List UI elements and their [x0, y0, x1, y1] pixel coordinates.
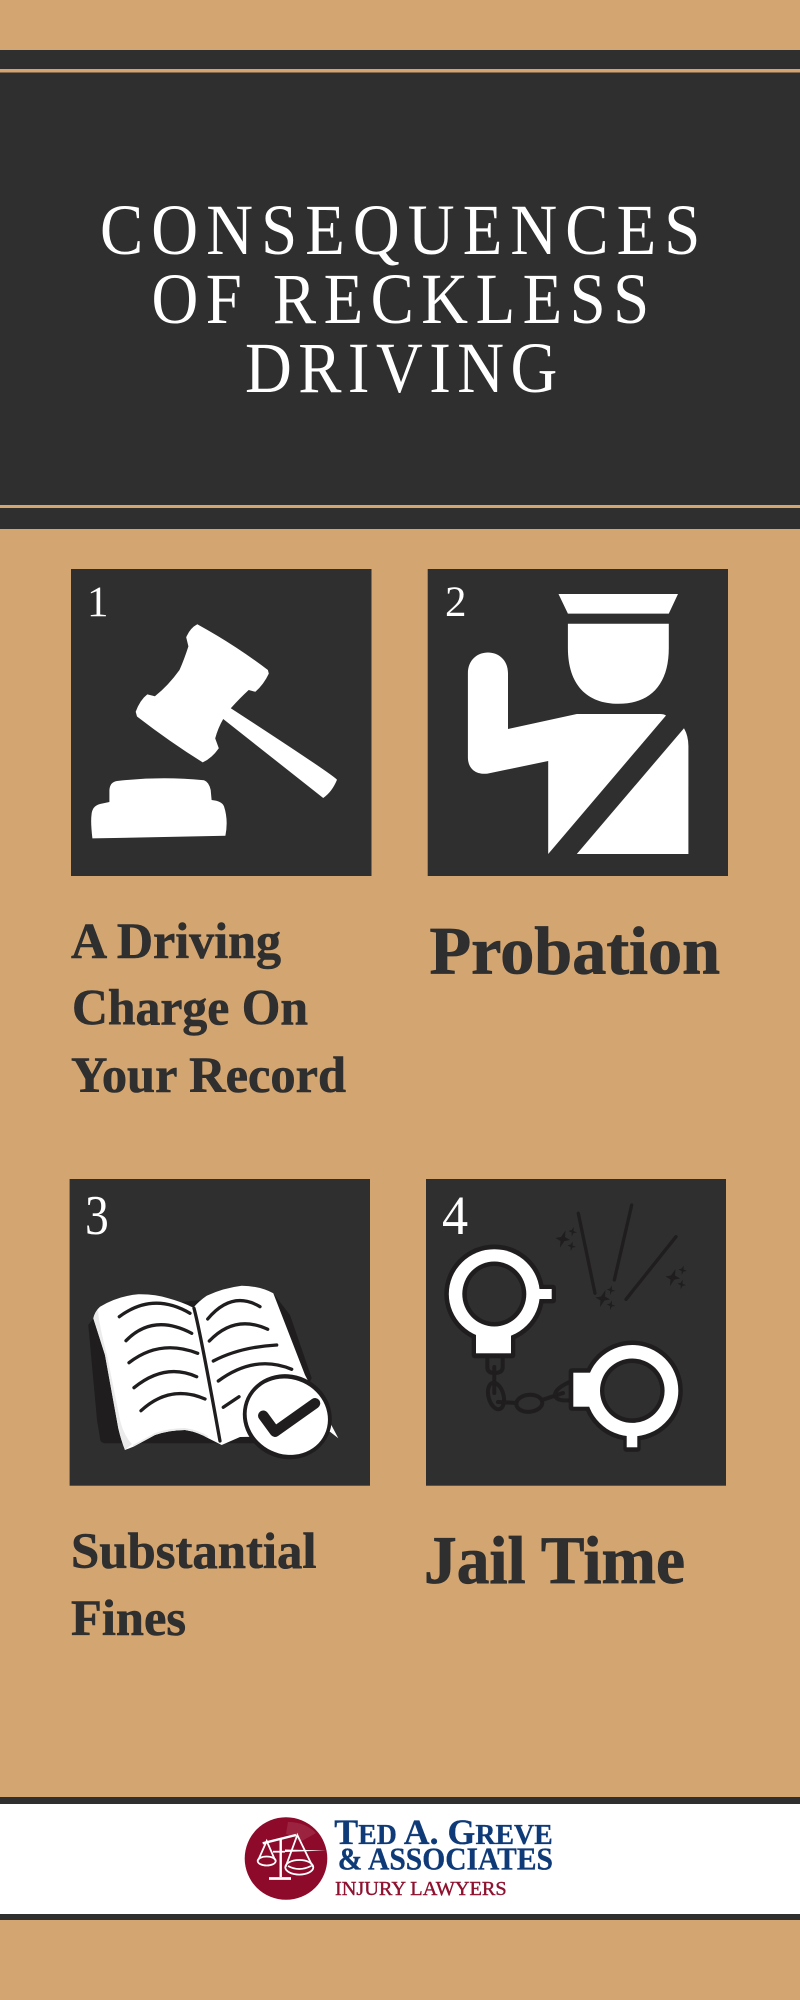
icon: open book with check badge — [88, 1286, 346, 1474]
panel: footer logo band — [0, 1797, 800, 1920]
title: DRIVING — [245, 328, 557, 408]
icon: gavel — [91, 624, 337, 838]
logo: firm name: & ASSOCIATES — [338, 1840, 553, 1876]
panel: title banner — [0, 50, 800, 529]
icon: broken handcuffs — [444, 1205, 687, 1452]
logo: scales of justice emblem — [245, 1817, 327, 1900]
title: CONSEQUENCES — [100, 190, 700, 270]
title — [100, 190, 700, 408]
number 1: 1 — [87, 579, 108, 626]
label: a driving charge on your record — [71, 914, 346, 1104]
label: jail time: Jail Time — [424, 1522, 685, 1598]
panel: item 3 substantial fines — [70, 1179, 370, 1647]
logo: firm name: TED A. GREVE — [334, 1812, 553, 1852]
panel: item 1 driving charge — [71, 569, 372, 1104]
label: substantial fines: Substantial — [71, 1524, 316, 1580]
panel: item 4 jail time — [424, 1179, 726, 1598]
number 3: 3 — [85, 1186, 109, 1247]
label: a driving charge on your record: A Driving — [71, 914, 281, 970]
panel: item 2 probation — [428, 569, 728, 989]
label: substantial fines: Fines — [71, 1591, 186, 1647]
title: OF RECKLESS — [152, 259, 649, 339]
label: a driving charge on your record: Charge On — [72, 980, 308, 1036]
label: probation: Probation — [430, 913, 720, 989]
logo: firm name — [334, 1812, 553, 1876]
number 2: 2 — [445, 579, 466, 626]
number 4: 4 — [442, 1185, 468, 1246]
label: a driving charge on your record: Your Record — [71, 1048, 346, 1104]
label: substantial fines — [71, 1524, 316, 1647]
icon: police officer — [468, 594, 688, 854]
logo: tagline: INJURY LAWYERS — [335, 1878, 507, 1900]
